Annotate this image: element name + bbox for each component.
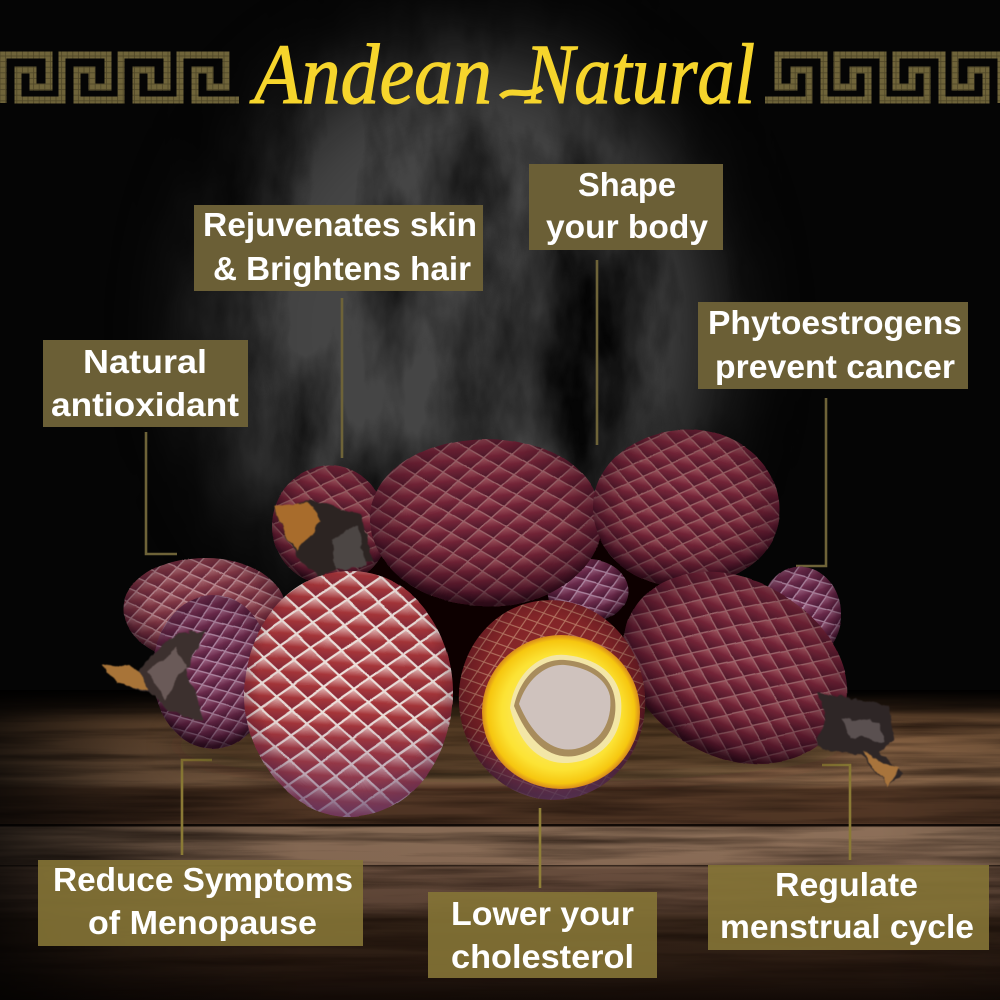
connector lines bbox=[146, 260, 850, 888]
border ornament: left greek key bbox=[3, 55, 239, 103]
label: regulate menstrual cycle: Regulate bbox=[775, 866, 918, 903]
title: Natural bbox=[524, 26, 755, 122]
title: Andean bbox=[249, 26, 492, 122]
label: rejuvenates skin: Rejuvenates skin bbox=[203, 206, 477, 243]
fruit: top center bbox=[369, 437, 601, 607]
label: phytoestrogens: prevent cancer bbox=[715, 348, 955, 385]
fruit: behind center bbox=[548, 558, 628, 622]
border ornament: right greek key bbox=[765, 55, 1000, 103]
fruit: back left bbox=[124, 558, 286, 662]
label: phytoestrogens: Phytoestrogens bbox=[708, 304, 962, 341]
label: natural antioxidant: Natural bbox=[83, 343, 207, 380]
label: reduce symptoms: of Menopause bbox=[88, 904, 317, 941]
background: black with smoke bbox=[148, 0, 769, 597]
label: lower cholesterol: cholesterol bbox=[451, 938, 634, 975]
pale ring around seed bbox=[510, 655, 621, 763]
fruit: right large with stem bbox=[589, 533, 902, 803]
label: lower cholesterol: Lower your bbox=[451, 895, 634, 932]
table shadow under fruits bbox=[170, 707, 850, 783]
label: rejuvenates skin: & Brightens hair bbox=[213, 250, 471, 287]
fruit: top right bbox=[592, 430, 780, 586]
label: rejuvenates skin bbox=[194, 205, 483, 291]
fruit: left purple with stem bbox=[100, 594, 272, 750]
label: regulate menstrual cycle: menstrual cycle bbox=[720, 908, 974, 945]
title bbox=[249, 26, 755, 122]
fruit pile bbox=[100, 430, 902, 816]
label: lower cholesterol bbox=[428, 892, 657, 978]
label: regulate menstrual cycle bbox=[708, 865, 989, 950]
label: reduce symptoms bbox=[38, 860, 363, 946]
label: phytoestrogens bbox=[698, 302, 968, 389]
label: natural antioxidant: antioxidant bbox=[51, 386, 239, 423]
fruit: top stem bbox=[274, 500, 372, 576]
label: reduce symptoms: Reduce Symptoms bbox=[53, 861, 353, 898]
fruit: front left with white net bbox=[245, 572, 453, 816]
dark gap behind fruit pile bbox=[300, 520, 740, 700]
yellow ring bbox=[482, 635, 640, 789]
fruit: back center small bbox=[273, 466, 387, 586]
label: shape your body: your body bbox=[546, 208, 709, 245]
seed rim bbox=[514, 660, 615, 757]
fruit: cut center showing yellow flesh bbox=[446, 588, 658, 812]
wooden table bbox=[0, 690, 1000, 1000]
label: shape your body: Shape bbox=[578, 166, 676, 203]
fruit: back right small bbox=[760, 564, 840, 660]
label: shape your body bbox=[529, 164, 723, 250]
pale seed bbox=[519, 665, 610, 750]
label: natural antioxidant bbox=[43, 340, 248, 427]
